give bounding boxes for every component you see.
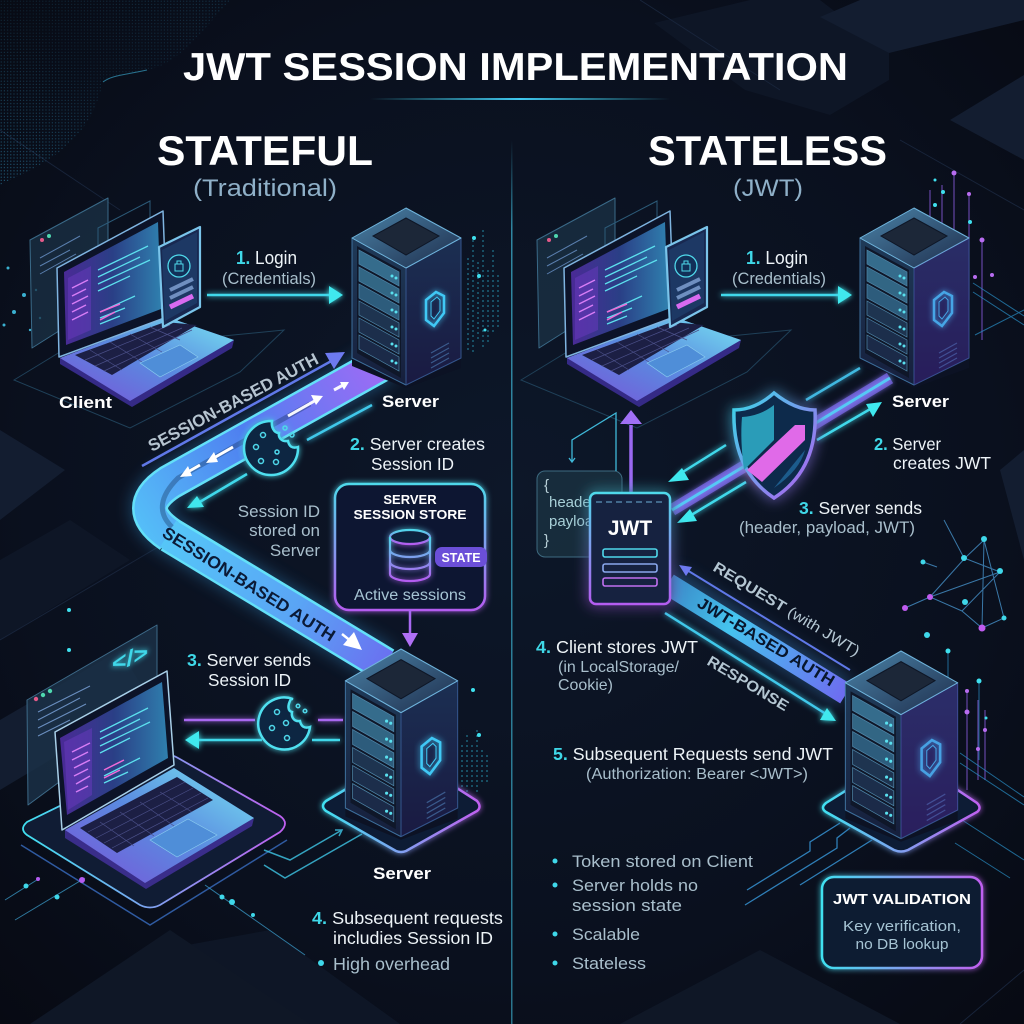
json panel bbox=[537, 471, 622, 557]
step 3 stateful bbox=[187, 650, 311, 690]
jwt issue band bbox=[672, 368, 890, 517]
session band bbox=[150, 362, 385, 665]
arrow: jwt to client bbox=[620, 410, 642, 493]
phone bbox=[159, 227, 200, 327]
step 5 stateless bbox=[553, 744, 833, 783]
label: server right: Server bbox=[892, 392, 949, 411]
connector: json bbox=[569, 413, 616, 471]
step 4 stateful: High overhead bbox=[333, 954, 450, 974]
heading: stateful: STATEFUL bbox=[157, 127, 373, 174]
arrows: session id to client bbox=[184, 720, 343, 749]
icon: cookie bottom bbox=[258, 697, 310, 749]
panel: jwt validation: Key verification, bbox=[843, 919, 961, 935]
data rain decorations bbox=[462, 173, 1024, 878]
heading: stateless: STATELESS bbox=[648, 127, 887, 174]
step 2: 2. Server creates bbox=[350, 434, 485, 454]
request label: REQUEST (with JWT) bbox=[710, 559, 863, 660]
panel: jwt validation: no DB lookup bbox=[856, 937, 948, 953]
icon: database bbox=[390, 530, 430, 581]
title: JWT SESSION IMPLEMENTATION bbox=[183, 46, 848, 89]
json panel: } bbox=[544, 532, 549, 549]
step 4 stateful bbox=[312, 908, 503, 974]
jwt label: JWT-BASED AUTH bbox=[694, 595, 837, 690]
icon: cookie top bbox=[244, 421, 298, 475]
json panel: heade bbox=[549, 494, 591, 511]
step 3 stateless: 3. Server sends bbox=[799, 498, 922, 518]
step 4 stateless bbox=[536, 637, 698, 694]
server pad: stateful bbox=[323, 785, 480, 852]
panel: jwt validation bbox=[822, 803, 982, 968]
step 2 bbox=[350, 434, 485, 474]
arrow: cookie to store bbox=[187, 405, 372, 508]
bullet list stateless: Server holds no bbox=[572, 877, 698, 895]
band label lower: SESSION-BASED AUTH bbox=[159, 523, 339, 645]
badge: state: STATE bbox=[441, 551, 481, 565]
code panel: </> bbox=[112, 639, 148, 677]
step 4 stateful: includies Session ID bbox=[333, 928, 493, 948]
connector traces bbox=[745, 823, 872, 905]
bullet list stateless: Stateless bbox=[572, 955, 646, 973]
jwt document: JWT bbox=[608, 517, 652, 540]
note: session id stored bbox=[238, 502, 320, 560]
step 1 stateless: (Credentials) bbox=[732, 269, 826, 288]
heading: stateful bbox=[157, 127, 373, 202]
step 1 stateless: 1. Login bbox=[746, 247, 808, 268]
step 4 stateless: 4. Client stores JWT bbox=[536, 637, 698, 657]
step 3 stateless bbox=[739, 498, 922, 537]
note: session id stored: Server bbox=[270, 541, 320, 560]
jwt band bbox=[668, 581, 846, 694]
step 4 stateful: 4. Subsequent requests bbox=[312, 908, 503, 928]
client laptop: stateful bottom bbox=[21, 625, 287, 925]
panel: jwt validation: JWT VALIDATION bbox=[833, 891, 971, 908]
step 3 stateless: (header, payload, JWT) bbox=[739, 518, 915, 537]
platform bbox=[21, 840, 287, 925]
step 3 stateful: Session ID bbox=[208, 670, 291, 690]
bullet list stateless bbox=[552, 853, 753, 973]
panel: server session store: SESSION STORE bbox=[354, 507, 467, 522]
network graph bbox=[902, 520, 1006, 638]
particle wave decoration bbox=[0, 0, 230, 331]
badge: state bbox=[435, 547, 487, 567]
floating panels bbox=[14, 198, 284, 428]
step 1 stateless bbox=[732, 247, 826, 288]
panel: server session store bbox=[335, 484, 487, 610]
json panel: payloa bbox=[549, 513, 594, 530]
step 2 stateless: 2. Server bbox=[874, 434, 941, 454]
json panel: { bbox=[544, 477, 549, 494]
step 1 login: (Credentials) bbox=[222, 269, 316, 288]
heading: stateless: (JWT) bbox=[733, 175, 803, 202]
step 4 stateless: Cookie) bbox=[558, 677, 613, 694]
step 2 stateless: creates JWT bbox=[893, 453, 991, 473]
step 1 login: 1. Login bbox=[236, 247, 297, 268]
arrow: upper auth bbox=[142, 352, 345, 466]
arrow: login bbox=[207, 286, 343, 304]
icon: shield bbox=[734, 393, 815, 498]
step 5 stateless: (Authorization: Bearer <JWT>) bbox=[586, 766, 808, 783]
server pad: stateless bbox=[823, 785, 980, 852]
jwt document bbox=[590, 493, 670, 604]
arrow: response bbox=[665, 613, 836, 721]
bullet list stateless: Scalable bbox=[572, 926, 640, 944]
server: stateful bottom bbox=[345, 649, 458, 840]
bullet list stateless: Token stored on Client bbox=[572, 853, 753, 871]
arrow: request bbox=[679, 565, 850, 670]
arrow: store to server bbox=[402, 610, 418, 647]
step 2 stateless bbox=[874, 434, 991, 473]
label: client: Client bbox=[59, 393, 112, 412]
note: session id stored: stored on bbox=[249, 521, 320, 540]
center divider bbox=[511, 140, 512, 1024]
heading: stateful: (Traditional) bbox=[193, 175, 337, 202]
step 4 stateless: (in LocalStorage/ bbox=[558, 659, 680, 676]
heading: stateless bbox=[648, 127, 887, 202]
response label: RESPONSE bbox=[704, 653, 792, 715]
step 3 stateful: 3. Server sends bbox=[187, 650, 311, 670]
arrowheads bbox=[668, 402, 882, 523]
label: server: Server bbox=[382, 392, 439, 411]
step 5 stateless: 5. Subsequent Requests send JWT bbox=[553, 744, 833, 764]
band label upper: SESSION-BASED AUTH bbox=[145, 350, 322, 456]
step 2: Session ID bbox=[371, 454, 454, 474]
bullet list stateless: session state bbox=[572, 897, 682, 915]
connector lines bbox=[264, 830, 362, 878]
client laptop: stateless top bbox=[521, 198, 791, 428]
client laptop: stateful top bbox=[14, 198, 284, 428]
server: stateless top bbox=[860, 208, 969, 388]
arrow: stateless login bbox=[721, 286, 852, 304]
server: stateful top bbox=[352, 208, 461, 388]
note: session id stored: Session ID bbox=[238, 502, 320, 521]
decorative traces bbox=[5, 878, 305, 955]
step 1 login bbox=[222, 247, 316, 288]
panel: server session store: Active sessions bbox=[354, 587, 466, 604]
label: server bottom: Server bbox=[373, 864, 431, 883]
server: stateless bottom bbox=[845, 651, 958, 842]
panel: server session store: SERVER bbox=[383, 492, 437, 507]
code panel bbox=[27, 625, 157, 805]
